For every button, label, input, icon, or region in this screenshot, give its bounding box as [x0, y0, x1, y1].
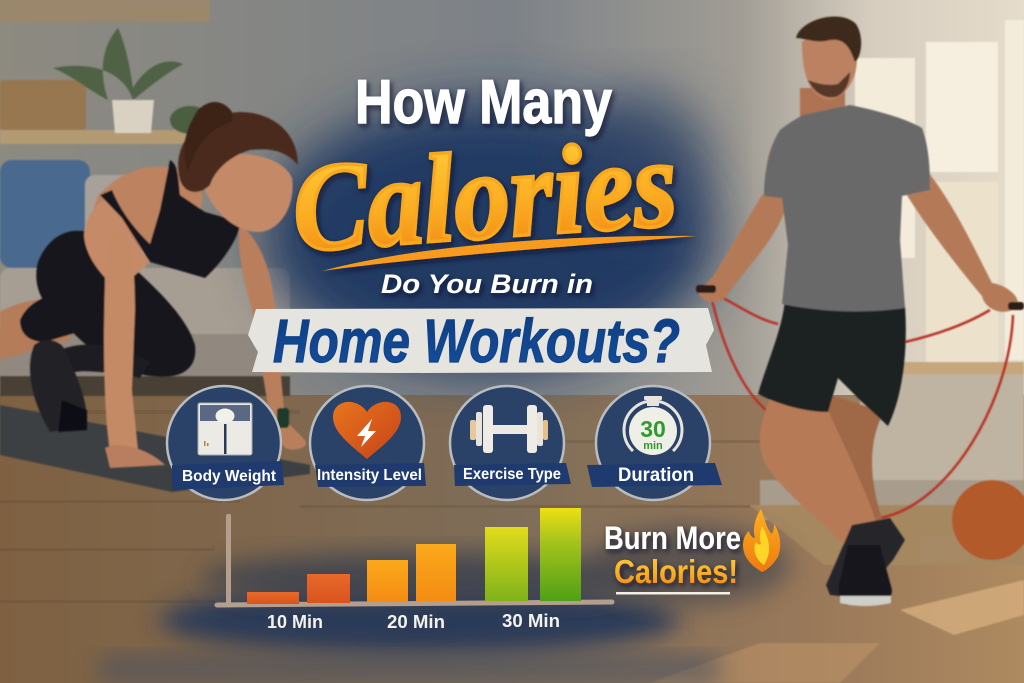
- woman doing mountain climbers: [0, 102, 306, 468]
- icon: stopwatch 30 min: 30: [640, 416, 666, 442]
- factor badges: [167, 386, 722, 500]
- icon: stopwatch 30 min: min: [643, 440, 663, 452]
- badge: Intensity Level: Intensity Level: [317, 467, 422, 484]
- title: [248, 68, 714, 375]
- title line: Do You Burn in: Do You Burn in: [381, 269, 593, 299]
- x-axis labels: 20 Min: [387, 612, 445, 632]
- badge: Duration: [587, 386, 722, 500]
- title line: Home Workouts?: Home Workouts?: [273, 307, 680, 375]
- bars: [247, 508, 581, 604]
- man with jump rope: [696, 17, 1024, 606]
- chart axes: [217, 514, 612, 606]
- icon: dumbbell: [470, 405, 548, 453]
- bar chart: calories by duration: [217, 508, 612, 632]
- badge: Intensity Level: [310, 386, 426, 500]
- x-axis labels: 10 Min: [267, 612, 323, 632]
- badge: Exercise Type: [450, 386, 571, 500]
- callout: burn more calories: Burn More: [604, 520, 741, 556]
- title line: Calories script: Calories: [288, 113, 681, 279]
- badge: Duration: Duration: [618, 465, 694, 486]
- callout: burn more calories: Calories!: [614, 553, 738, 590]
- badge: Exercise Type: Exercise Type: [463, 466, 561, 483]
- icon: weighing scale: [198, 403, 252, 455]
- icon: heart with bolt: [333, 402, 401, 459]
- exercise mat: [0, 405, 310, 492]
- icon: flame: [743, 509, 780, 572]
- x-axis labels: [267, 611, 560, 632]
- badge: Body Weight: [167, 386, 284, 500]
- x-axis labels: 30 Min: [502, 611, 560, 631]
- navy paint backdrop behind title: [100, 90, 790, 683]
- title line: How Many: How Many: [355, 68, 612, 137]
- white brush banner: [248, 308, 714, 373]
- callout: burn more calories: [604, 509, 780, 594]
- badge: Body Weight: Body Weight: [182, 468, 277, 485]
- icon: stopwatch 30 min: [624, 396, 682, 455]
